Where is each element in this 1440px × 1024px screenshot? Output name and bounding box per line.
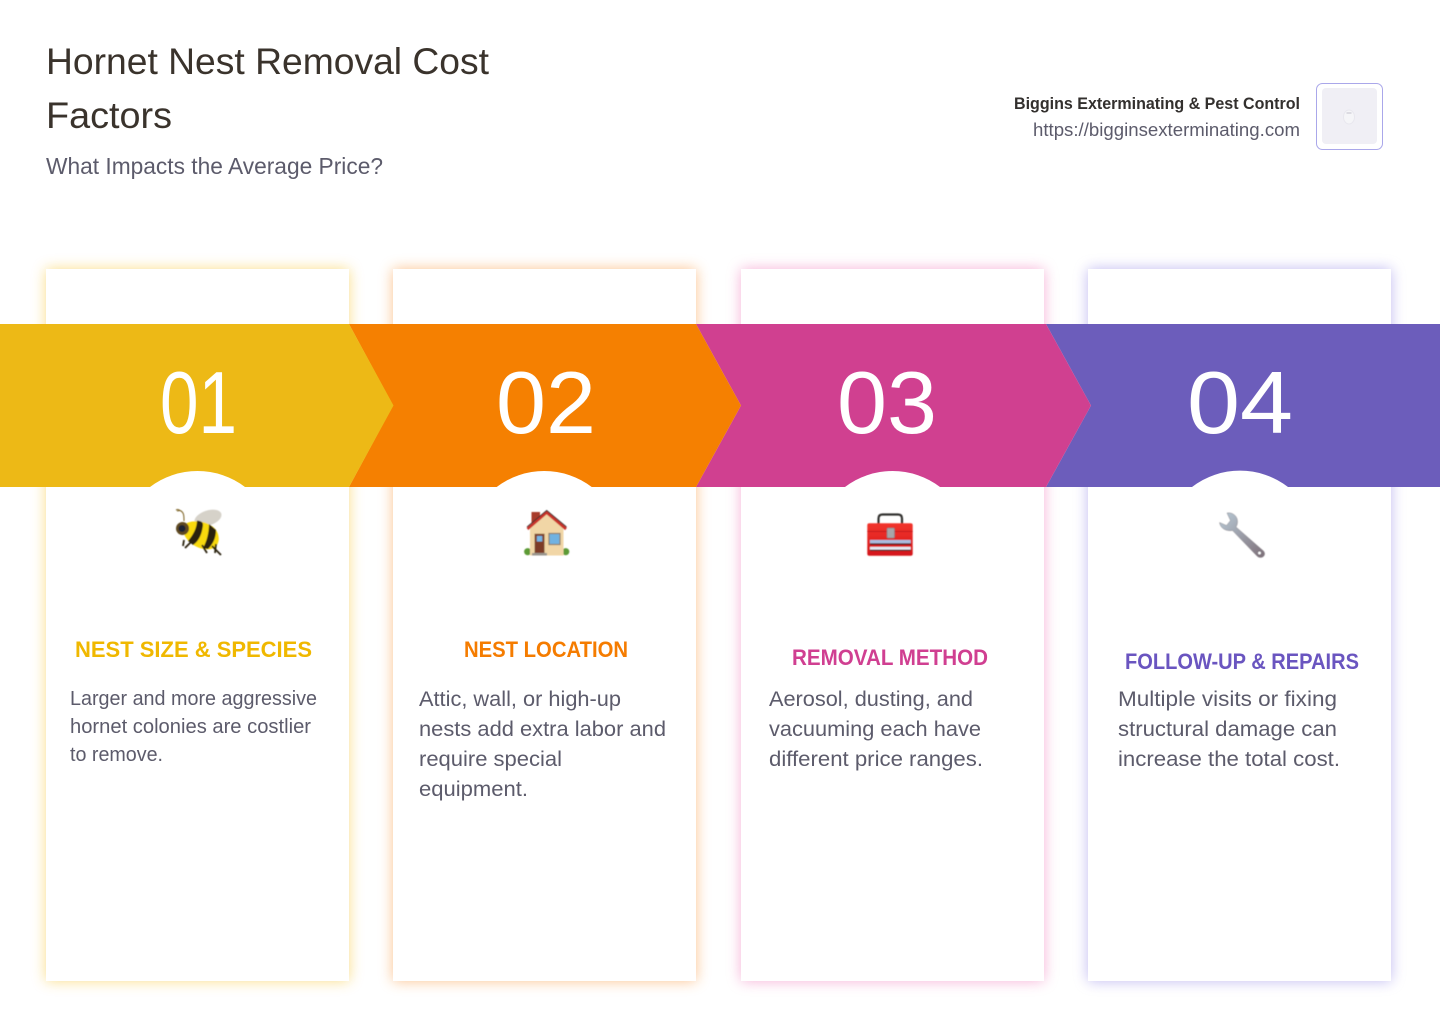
body text: equipment. <box>419 778 528 801</box>
body text: to remove. <box>70 744 163 766</box>
chevron band <box>0 324 1440 487</box>
body text <box>769 688 983 771</box>
title <box>46 41 490 136</box>
body text: Aerosol, dusting, and <box>769 688 973 711</box>
body text <box>70 688 317 766</box>
number 03: 03 <box>837 353 937 452</box>
brand block <box>1014 84 1382 150</box>
body text: different price ranges. <box>769 748 983 771</box>
step 2: nest location <box>419 353 666 801</box>
step 4: follow-up and repairs <box>1118 353 1359 771</box>
title: Hornet Nest Removal Cost <box>46 41 490 82</box>
company name: Biggins Exterminating & Pest Control <box>1014 94 1300 113</box>
body text <box>419 688 666 801</box>
logo placeholder <box>1316 84 1382 150</box>
body text: hornet colonies are costlier <box>70 716 311 738</box>
body text: increase the total cost. <box>1118 748 1340 771</box>
body text: require special <box>419 748 562 771</box>
number 02: 02 <box>496 353 596 452</box>
body text <box>1118 688 1340 771</box>
heading: FOLLOW-UP & REPAIRS <box>1125 649 1359 674</box>
body text: structural damage can <box>1118 718 1337 741</box>
icon: house <box>524 510 569 556</box>
heading: NEST SIZE & SPECIES <box>75 637 312 662</box>
title: Factors <box>46 95 172 136</box>
icon: toolbox <box>867 514 913 556</box>
company url: https://bigginsexterminating.com <box>1033 120 1300 140</box>
body text: nests add extra labor and <box>419 718 666 741</box>
number 01: 01 <box>160 353 237 452</box>
number 04: 04 <box>1187 353 1293 452</box>
icon: bee <box>176 507 224 555</box>
header: title and subtitle <box>46 41 490 179</box>
white arcs under the chevrons <box>150 471 1288 487</box>
subtitle: What Impacts the Average Price? <box>46 153 383 179</box>
body text: Attic, wall, or high-up <box>419 688 621 711</box>
step 1: nest size and species <box>70 353 317 766</box>
heading: REMOVAL METHOD <box>792 645 988 670</box>
icon: wrench <box>1220 513 1265 558</box>
heading: NEST LOCATION <box>464 637 628 662</box>
body text: Larger and more aggressive <box>70 688 317 710</box>
body text: vacuuming each have <box>769 718 981 741</box>
body text: Multiple visits or fixing <box>1118 688 1337 711</box>
step 3: removal method <box>769 353 988 771</box>
panel backgrounds: four glowing cards <box>46 269 1391 981</box>
